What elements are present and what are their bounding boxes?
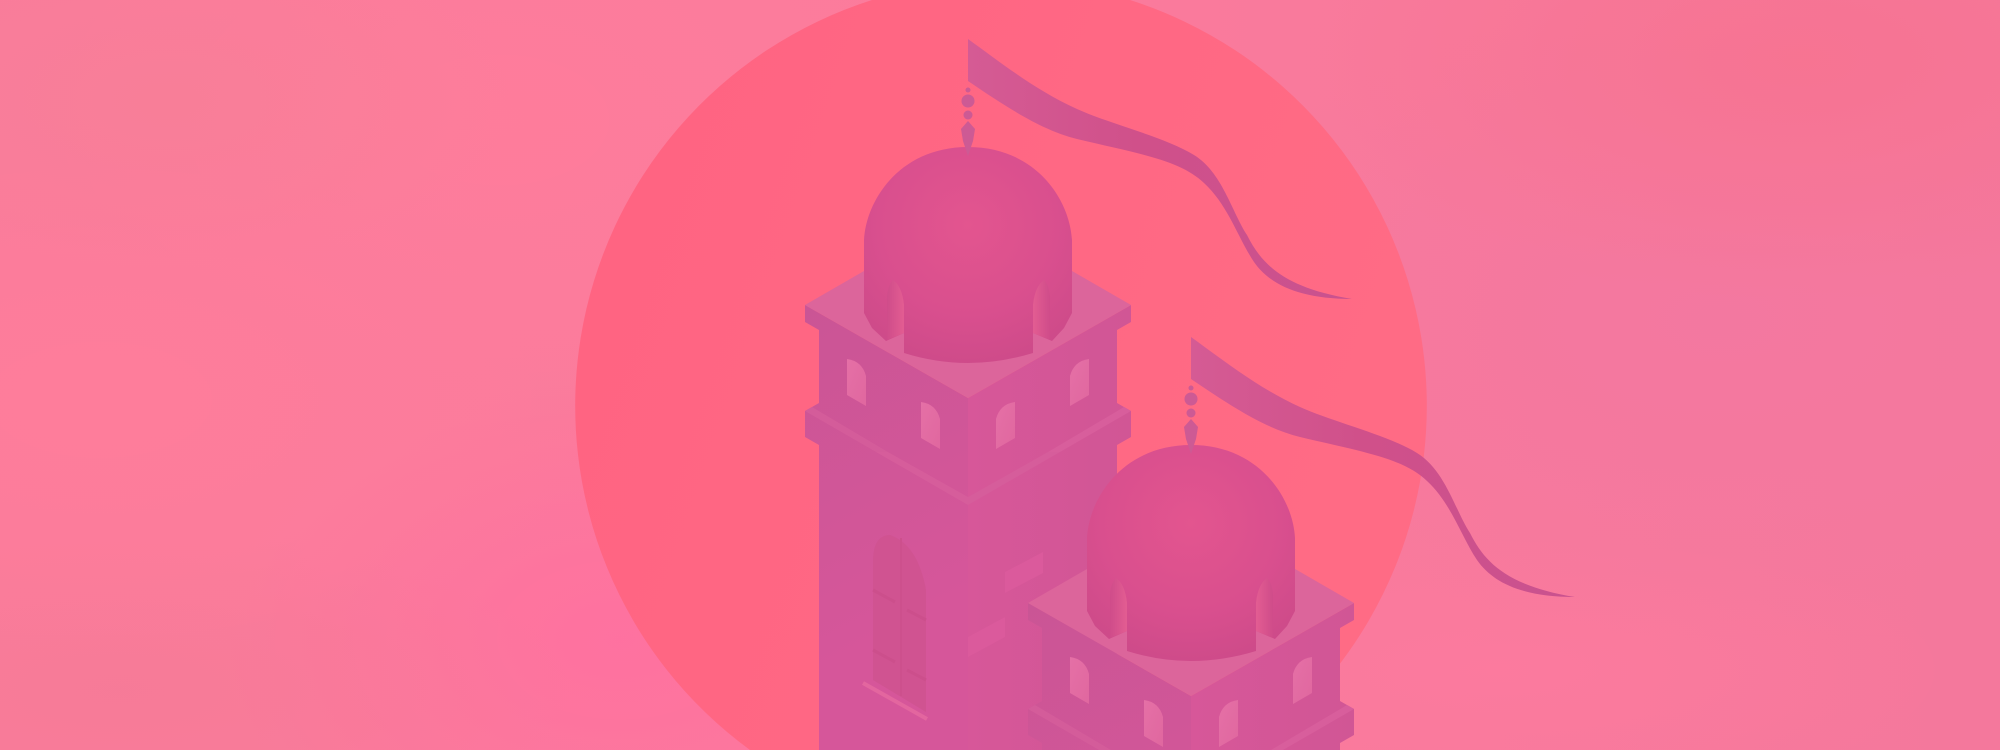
- right wall window panels: [968, 552, 1043, 657]
- door: [863, 535, 927, 719]
- tall tower with dome and flag: [805, 39, 1352, 750]
- short tower with dome and flag: [1028, 337, 1575, 750]
- sun circle: [575, 0, 1427, 750]
